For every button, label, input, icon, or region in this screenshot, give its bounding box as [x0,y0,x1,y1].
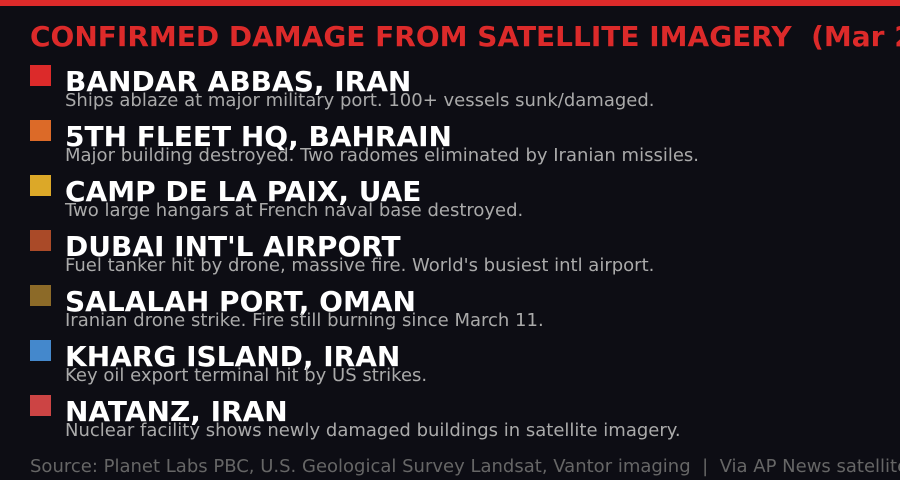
item: Bandar Abbas: BANDAR ABBAS, IRAN [65,65,411,98]
item: 5th Fleet HQ [30,120,699,166]
item: Bandar Abbas [30,65,655,111]
item: Kharg Island: Key oil export terminal hit by US strikes. [65,365,427,386]
item: 5th Fleet HQ: 5TH FLEET HQ, BAHRAIN [65,120,452,153]
item: Camp de la Paix [30,175,523,221]
item: Camp de la Paix: Two large hangars at French naval base destroyed. [64,200,523,221]
item: Salalah Port: Iranian drone strike. Fire still burning since March 11. [65,310,544,331]
item: Camp de la Paix: CAMP DE LA PAIX, UAE [65,175,421,208]
item: Kharg Island: KHARG ISLAND, IRAN [65,340,400,373]
item: Kharg Island [30,340,427,386]
item: Salalah Port: SALALAH PORT, OMAN [65,285,416,318]
item: Natanz: NATANZ, IRAN [65,395,288,428]
item: Dubai airport: Fuel tanker hit by drone, massive fire. World's busiest intl airport. [65,255,654,276]
item: Natanz: Nuclear facility shows newly damaged buildings in satellite imagery. [65,420,681,441]
item: Dubai airport [30,230,654,276]
item: Natanz [30,395,681,441]
item: Dubai airport: DUBAI INT'L AIRPORT [65,230,401,263]
item: 5th Fleet HQ: Major building destroyed. Two radomes eliminated by Iranian missiles. [65,145,699,166]
top accent bar [0,0,900,6]
item: Salalah Port [30,285,544,331]
item: Bandar Abbas: Ships ablaze at major military port. 100+ vessels sunk/damaged. [65,90,655,111]
